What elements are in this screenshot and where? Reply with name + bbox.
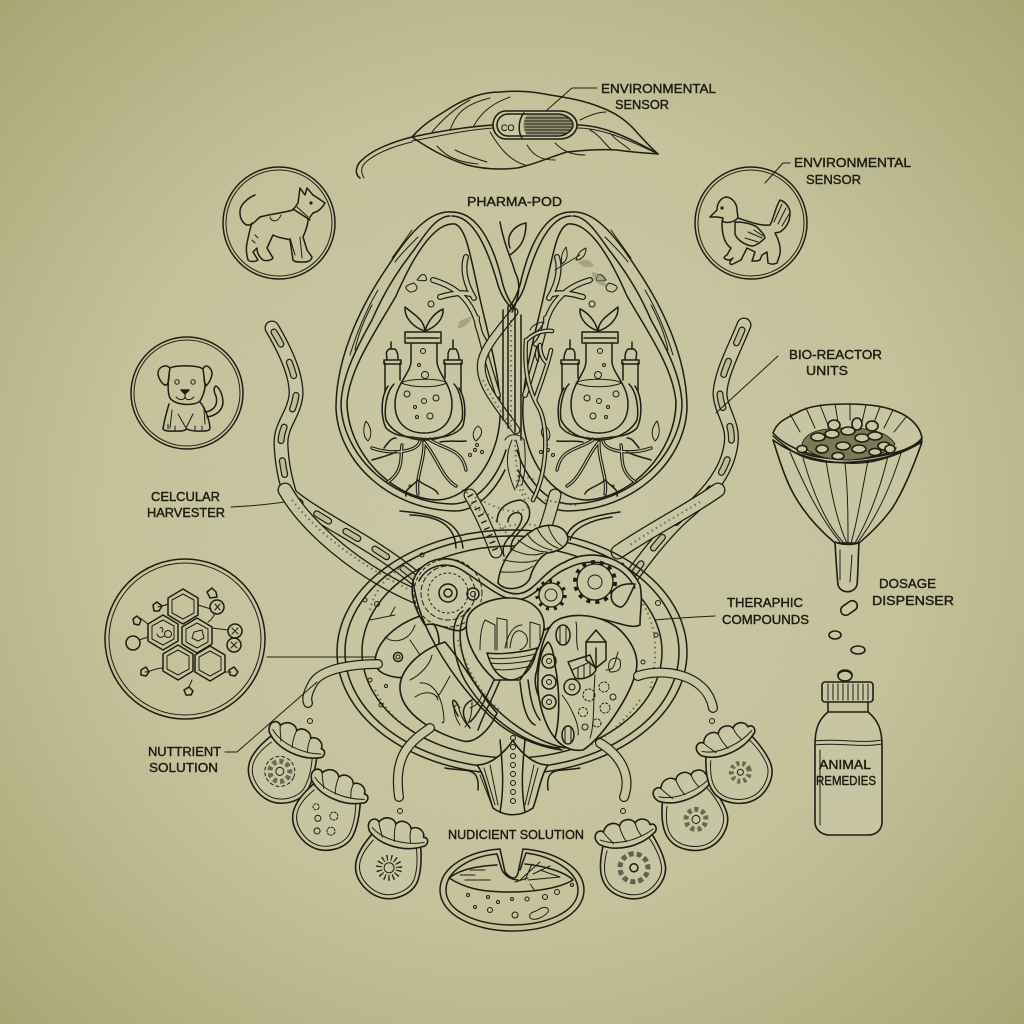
icon: bird medallion — [695, 167, 807, 279]
drip tube: left side — [307, 664, 378, 724]
grey blotch leaves — [458, 247, 606, 328]
label: environmental sensor (bird): ENVIRONMENTAL — [794, 155, 911, 170]
center cup lobe — [413, 581, 565, 750]
label: bio-reactor units: BIO-REACTOR — [789, 347, 882, 362]
label: environmental sensor (leaf): SENSOR — [615, 97, 669, 112]
label: nutrient solution: SOLUTION — [149, 760, 218, 775]
label: animal remedies: REMEDIES — [816, 773, 876, 788]
ribbed segment — [498, 525, 568, 589]
label: bio-reactor units: UNITS — [806, 363, 848, 378]
label: environmental sensor (leaf): ENVIRONMENTAL — [601, 81, 716, 96]
lower heart chamber — [337, 525, 687, 815]
label: cellular harvester: CELCULAR — [151, 489, 220, 504]
icon: solution dish — [440, 849, 584, 931]
forked vessels under cup — [453, 680, 540, 730]
leader line: cellular harvester — [231, 502, 284, 507]
label: nutrient solution bottom: NUDICIENT SOLUTION — [448, 827, 584, 842]
leader line: therapeutic compounds — [655, 616, 715, 620]
crystal side cells — [538, 642, 559, 738]
leader line: nutrient solution — [225, 682, 317, 752]
lower-left vessel lobe — [400, 642, 497, 741]
central tree — [481, 222, 552, 500]
left tentacle: harvester — [272, 328, 415, 596]
leader line: bird sensor — [765, 163, 790, 183]
small left harvester lobe — [370, 607, 439, 678]
icon: leaf with environmental sensor — [356, 91, 658, 178]
left pod — [336, 212, 513, 511]
pouch 4 — [590, 813, 672, 906]
label: nutrient solution: NUTTRIENT — [148, 744, 221, 759]
dosing nozzle on right tentacle — [611, 584, 635, 607]
label: dosage dispenser: DOSAGE — [879, 576, 936, 591]
leader line: bio-reactor units — [716, 356, 778, 413]
right tentacle: harvester — [618, 325, 744, 592]
label: animal remedies: ANIMAL — [819, 757, 871, 772]
icon: cat medallion — [223, 167, 335, 279]
leader line: molecule to harvester — [267, 656, 392, 658]
pills falling — [829, 599, 865, 680]
label: pharma-pod: PHARMA-POD — [467, 194, 562, 209]
icon: dog medallion — [131, 337, 243, 449]
pouch 3 — [349, 813, 431, 905]
right pod — [510, 212, 687, 511]
pouch 6 — [690, 715, 782, 815]
pouch 2 — [283, 762, 373, 860]
gear lobe — [412, 555, 641, 631]
icon: funnel dispenser — [773, 404, 922, 592]
chamber rings — [337, 530, 687, 774]
icon: leaf with environmental sensor: CO — [501, 123, 514, 133]
label: cellular harvester: HARVESTER — [147, 505, 225, 520]
leader line: leaf sensor — [547, 88, 597, 110]
label: dosage dispenser: DISPENSER — [872, 593, 954, 608]
icon: molecule medallion — [105, 559, 265, 719]
bottom stem — [445, 736, 580, 815]
label: therapeutic compounds: THERAPHIC — [727, 595, 803, 610]
upper root tangle — [400, 476, 620, 556]
label: environmental sensor (bird): SENSOR — [806, 172, 861, 187]
drip tube: lower left — [398, 728, 430, 814]
drip tube: lower right — [600, 743, 627, 814]
icon: medicine bottle — [815, 671, 882, 835]
pouch 5 — [647, 763, 737, 861]
pouch 1 — [238, 714, 330, 814]
drip tube: right side — [638, 673, 714, 724]
crystal lobe — [535, 615, 637, 750]
label: therapeutic compounds: COMPOUNDS — [722, 612, 809, 627]
